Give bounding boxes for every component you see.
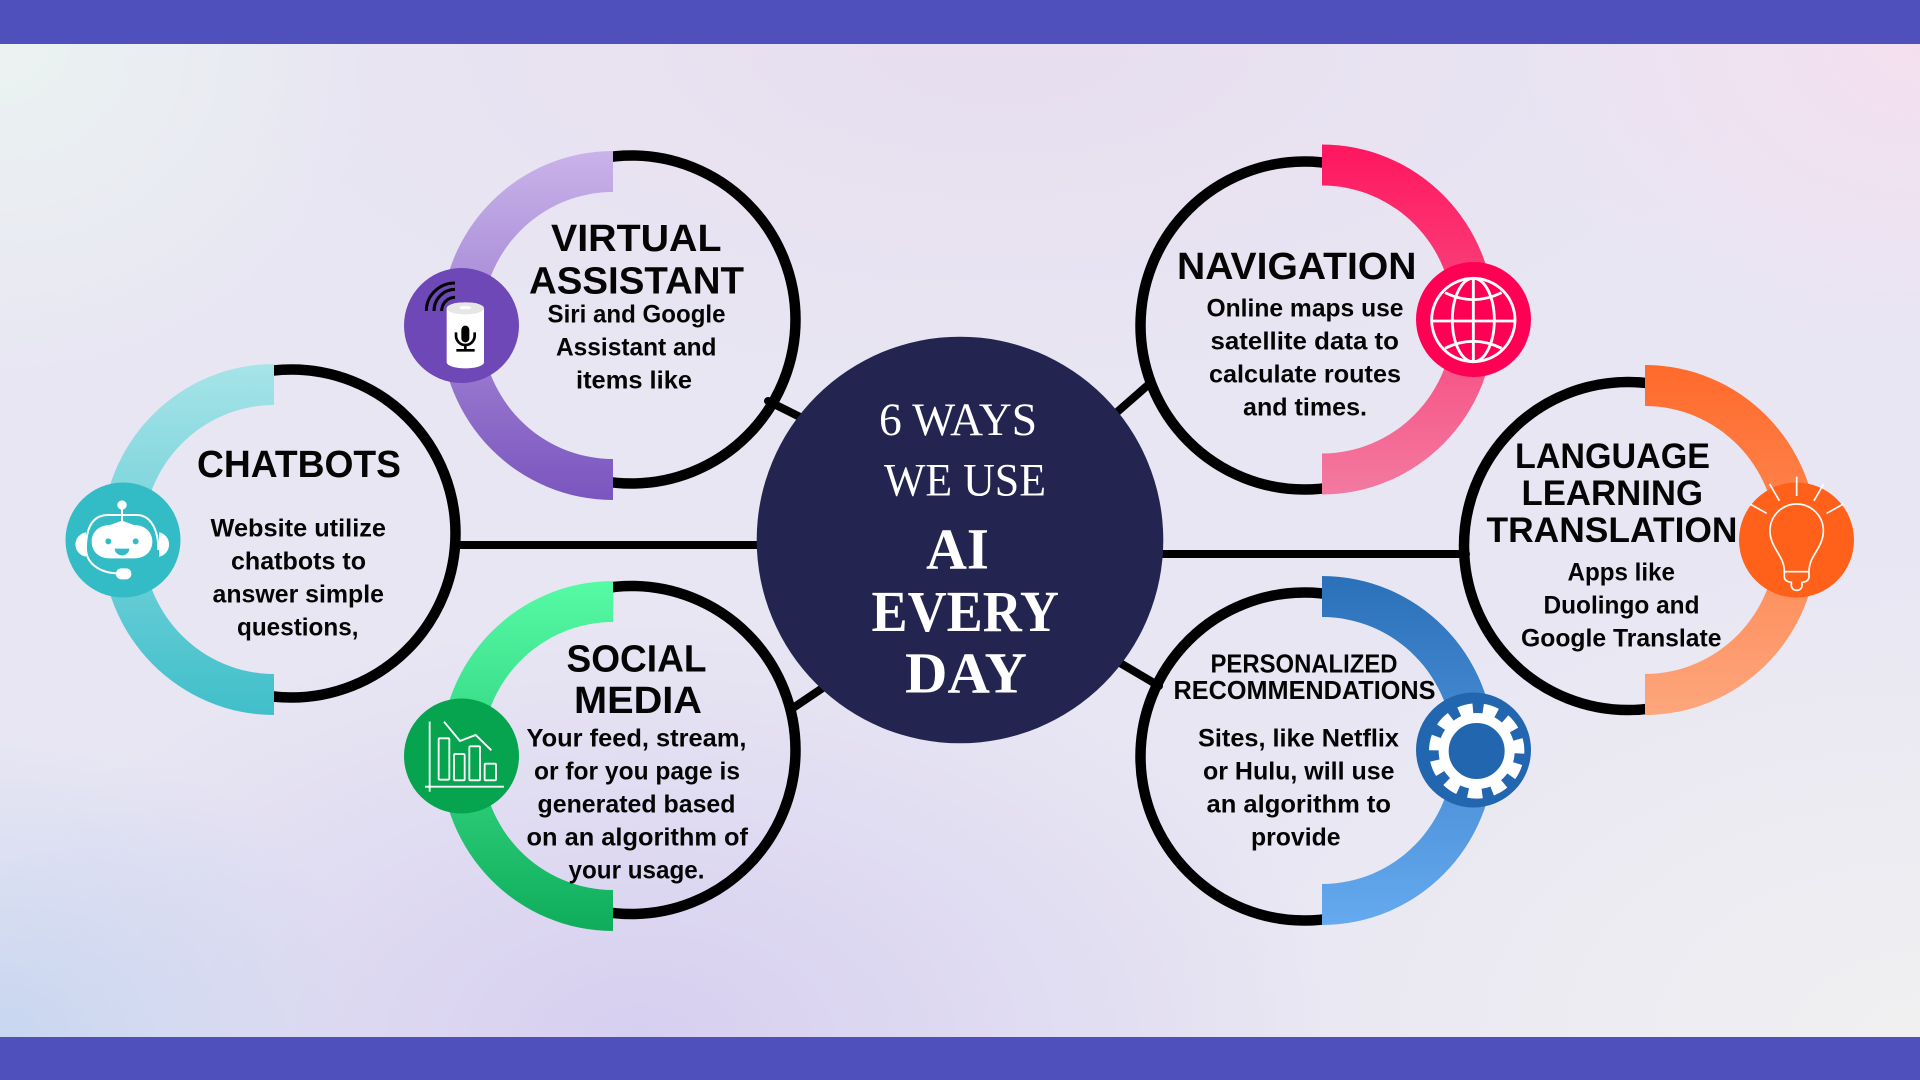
panel: personalized recommendations [1140, 576, 1533, 925]
heading [566, 638, 706, 722]
central circle title: AI [926, 516, 989, 582]
description: Website utilize [210, 514, 386, 542]
description: calculate routes [1209, 360, 1401, 388]
description: Duolingo and [1544, 592, 1700, 620]
description [548, 300, 726, 394]
description [1206, 294, 1404, 422]
description: Online maps use [1206, 294, 1404, 322]
arc [102, 364, 274, 715]
description [1198, 724, 1399, 852]
heading: LANGUAGE [1515, 437, 1710, 476]
description: Siri and Google [548, 300, 726, 328]
arc [1322, 576, 1495, 925]
description: your usage. [568, 856, 704, 884]
heading: RECOMMENDATIONS [1174, 675, 1436, 705]
icon: chart [404, 698, 519, 814]
heading: TRANSLATION [1486, 511, 1738, 550]
description: Sites, like Netflix [1198, 724, 1399, 752]
ring [1464, 382, 1792, 710]
heading: CHATBOTS [197, 444, 401, 486]
heading: NAVIGATION [1177, 246, 1416, 288]
arc [440, 151, 613, 500]
description: Assistant and [556, 334, 716, 362]
heading [1486, 437, 1738, 550]
central circle title [757, 337, 1163, 743]
description: Your feed, stream, [526, 724, 746, 752]
description [1521, 558, 1722, 652]
central circle title: DAY [905, 640, 1027, 706]
description: answer simple [212, 580, 384, 608]
description: and times. [1243, 394, 1367, 422]
heading: VIRTUAL [551, 218, 722, 260]
description: Apps like [1568, 558, 1675, 586]
central circle title: EVERY [872, 579, 1059, 644]
panel: language learning translation [1464, 365, 1854, 715]
heading: MEDIA [574, 680, 702, 722]
central circle title: 6 WAYS [879, 394, 1037, 446]
heading [529, 218, 744, 302]
heading: ASSISTANT [529, 260, 744, 302]
bottom bar [0, 1037, 1920, 1080]
description [210, 514, 386, 642]
description: or for you page is [534, 758, 740, 786]
ring [128, 370, 456, 698]
heading: LEARNING [1522, 474, 1703, 513]
connectors to central circle [455, 385, 1466, 708]
top bar [0, 0, 1920, 44]
ring [1140, 592, 1468, 920]
description: on an algorithm of [526, 824, 749, 852]
icon: light bulb [1739, 477, 1854, 598]
heading: PERSONALIZED [1210, 648, 1398, 678]
icon: globe [1416, 262, 1531, 377]
description: items like [576, 366, 692, 394]
arc [440, 581, 613, 931]
description: provide [1251, 824, 1341, 852]
description: satellite data to [1210, 328, 1399, 356]
icon: robot [66, 482, 180, 598]
icon: smart speaker [404, 268, 519, 383]
description: Google Translate [1521, 624, 1722, 652]
description: or Hulu, will use [1203, 758, 1395, 786]
description: questions, [237, 614, 358, 642]
description [526, 724, 749, 884]
heading: SOCIAL [566, 638, 706, 680]
central circle title: WE USE [884, 454, 1046, 506]
ring [468, 156, 796, 484]
arc [1645, 365, 1818, 715]
description: an algorithm to [1206, 790, 1391, 818]
ring [1140, 162, 1468, 490]
icon: gear [1416, 692, 1533, 808]
arc [1322, 144, 1495, 494]
panel: social media [404, 581, 796, 931]
panel: navigation [1140, 144, 1531, 494]
description: generated based [538, 790, 736, 818]
panel: chatbots [66, 364, 456, 715]
heading [1174, 648, 1436, 705]
ring [468, 586, 796, 914]
description: chatbots to [231, 548, 366, 576]
panel: virtual assistant [404, 151, 796, 500]
